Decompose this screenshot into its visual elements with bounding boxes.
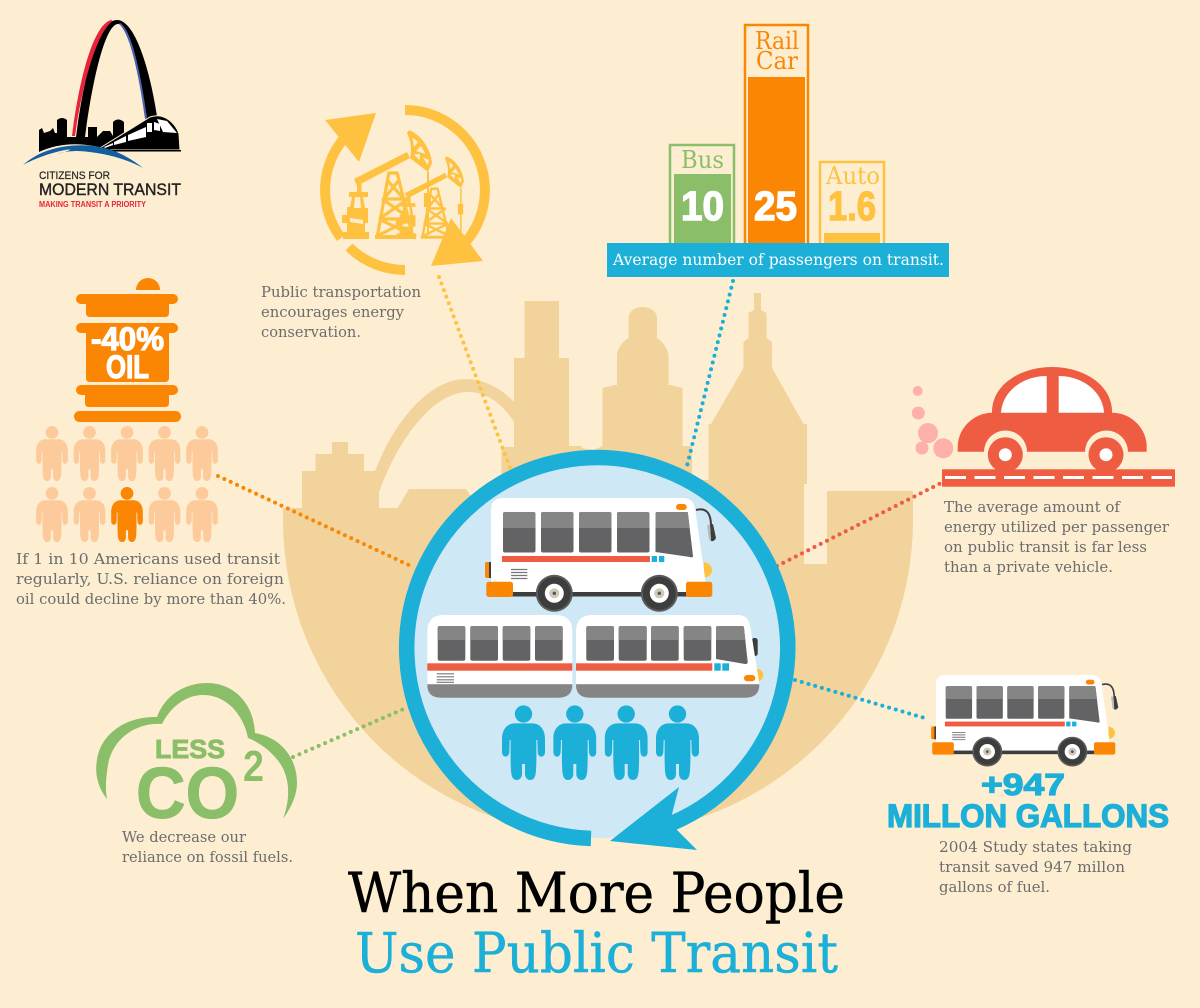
bar: rail car [745,25,808,245]
text: 2004 study [939,838,1132,896]
barrel label: -40%: -40% [91,321,164,357]
text: 2004 study: 2004 Study states taking [939,838,1132,856]
logo: Citizens for Modern Transit [23,20,181,209]
dotted connector: oil pump [439,277,510,468]
bar chart: average passengers [607,25,949,277]
title [348,861,845,985]
icon: small bus [931,675,1118,766]
dotted connector: oil barrel [218,476,413,567]
label: superscript 2: 2 [243,742,264,791]
panel: fuel savings [887,675,1169,896]
chart caption band: Average number of passengers on transit. [612,251,944,269]
text: fossil fuels [122,828,293,866]
bus [485,498,716,612]
bar: bus: Bus [681,146,724,174]
text: energy conservation [261,283,421,341]
chart caption band [607,243,949,277]
panel: central transit circle [407,458,788,850]
people: one in ten highlighted [36,426,218,542]
rail car: rear section [427,615,572,698]
text: 2004 study: transit saved 947 millon [939,858,1125,876]
logo arch blue stripe [119,23,147,119]
text: fossil fuels: reliance on fossil fuels. [122,848,293,866]
title: Use Public Transit [355,921,838,985]
logo arch [76,20,157,137]
text: 2004 study: gallons of fuel. [939,878,1050,896]
icon: cloud outline [96,683,297,819]
title: When More People [348,861,845,925]
panel: energy conservation [261,110,485,341]
icon: oil barrel [74,278,181,422]
logo name line 1: CITIZENS FOR [39,170,110,182]
bar: auto: 1.6 [828,183,876,229]
text: fossil fuels: We decrease our [122,828,247,846]
text: foreign oil: regularly, U.S. reliance on foreign [16,570,284,588]
barrel label: OIL: OIL [106,349,149,385]
bar: auto: Auto [825,162,880,190]
text: foreign oil: oil could decline by more than 40%. [16,590,286,608]
dotted connector: car [777,481,945,566]
stat: +947: +947 [981,767,1065,802]
dotted connector: passenger chart [686,281,733,470]
logo arch red stripe [72,20,113,136]
label: LESS: LESS [155,734,225,764]
bar: rail car: Rail [755,27,799,55]
circular arrow ring [407,458,788,850]
panel: oil barrel and people [16,278,286,608]
text: foreign oil: If 1 in 10 Americans used transit [16,550,280,568]
logo train [100,116,181,152]
text: energy per passenger: than a private vehicle. [944,558,1113,576]
dotted connector: fuel savings bus [795,680,928,719]
logo blue swoosh [23,145,143,168]
icon: recycling arrows and oil pumps [325,110,485,270]
bar: rail car: 25 [754,183,797,229]
panel: less CO2 [96,683,297,866]
panel: car energy use [912,367,1175,576]
text: energy per passenger: energy utilized per passenger [944,518,1170,536]
text: energy per passenger [944,498,1170,576]
logo skyline [39,118,135,152]
blue passengers [502,705,699,780]
text: energy conservation: conservation. [261,323,361,341]
circle background [407,458,787,838]
dotted connector: CO2 [293,708,406,757]
icon: exhaust smoke [912,386,953,458]
text: foreign oil [16,550,286,608]
logo tagline: MAKING TRANSIT A PRIORITY [39,200,147,209]
text: energy conservation: Public transportation [261,283,421,301]
icon: car on road [942,367,1175,487]
bar: rail car: Car [756,47,798,75]
bar: auto [820,162,884,245]
stat: million gallons: MILLON GALLONS [887,798,1169,834]
city skyline bowl silhouette [283,293,913,835]
rail car: front section [576,615,763,698]
bar: bus [670,145,734,245]
text: energy per passenger: on public transit is far less [944,538,1147,556]
bar: bus: 10 [681,183,724,229]
logo name line 2: MODERN TRANSIT [39,180,181,199]
text: energy conservation: encourages energy [261,303,405,321]
text: energy per passenger: The average amount of [944,498,1121,516]
label: CO: CO [136,754,239,834]
